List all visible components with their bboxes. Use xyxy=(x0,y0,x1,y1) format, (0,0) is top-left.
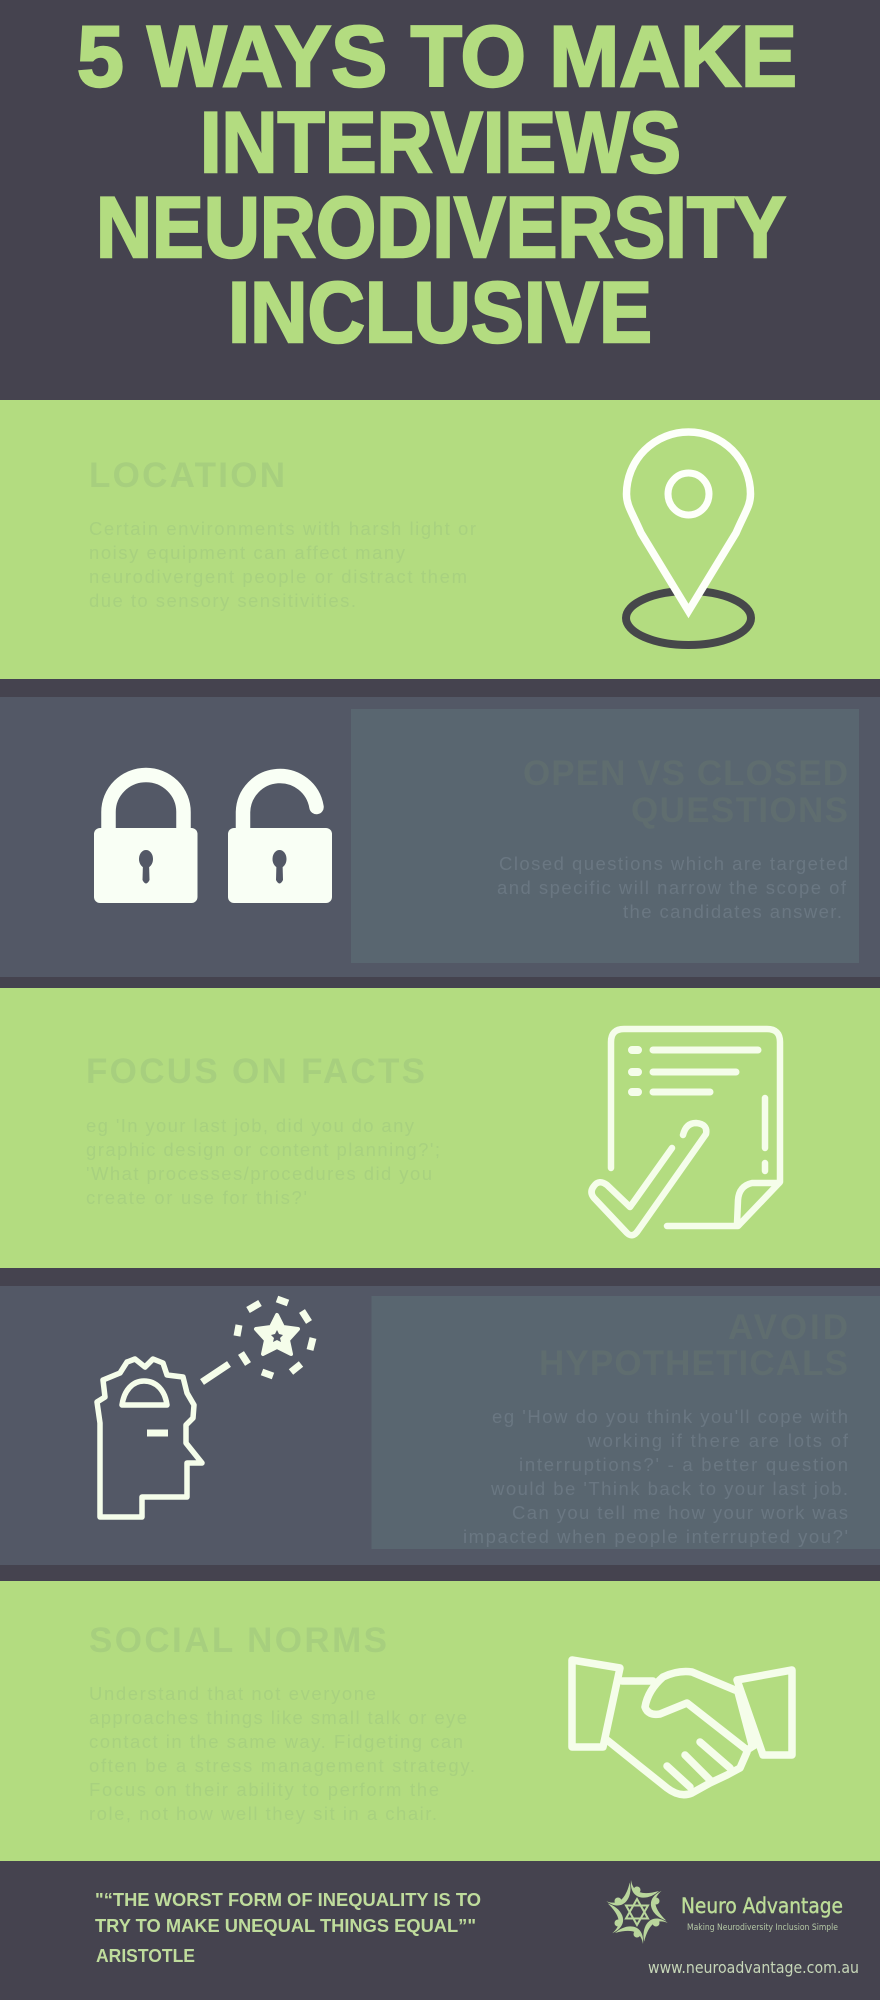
icon: map pin xyxy=(626,432,751,645)
text block: focus on facts: create or use for this?' xyxy=(86,1187,307,1208)
text block: avoid hypotheticals: impacted when people interrupted you?' xyxy=(463,1526,848,1547)
panel: footer xyxy=(0,1861,880,2000)
text block: avoid hypotheticals: Can you tell me how your work was xyxy=(512,1502,848,1523)
heading: open vs closed questions: OPEN VS CLOSED xyxy=(523,754,848,793)
heading: open vs closed questions: QUESTIONS xyxy=(631,791,848,830)
heading: open vs closed questions xyxy=(523,754,848,830)
icon: head with gear and star xyxy=(97,1299,313,1517)
text block: avoid hypotheticals: working if there are lots of xyxy=(586,1430,849,1451)
text block: location xyxy=(89,518,476,611)
icon: handshake xyxy=(572,1660,792,1795)
text block: location: noisy equipment can affect many xyxy=(89,542,406,563)
heading: avoid hypotheticals: HYPOTHETICALS xyxy=(539,1344,848,1383)
text block: social norms: often be a stress management strategy. xyxy=(89,1755,475,1776)
text block: open vs closed questions: Closed questions which are targeted xyxy=(499,853,848,874)
heading: location: LOCATION xyxy=(89,456,285,495)
text block: location: neurodivergent people or distract them xyxy=(89,566,467,587)
icon: open padlock xyxy=(228,776,332,903)
icon: neuro advantage logo xyxy=(598,1877,676,1947)
text block: focus on facts xyxy=(86,1115,440,1208)
text box background xyxy=(372,1296,880,1549)
heading: focus on facts: FOCUS ON FACTS xyxy=(86,1052,425,1091)
text block: social norms: Focus on their ability to perform the xyxy=(89,1779,439,1800)
quote: "“THE WORST FORM OF INEQUALITY IS TO xyxy=(95,1889,481,1910)
title: INTERVIEWS xyxy=(200,95,681,191)
heading: avoid hypotheticals xyxy=(539,1308,848,1383)
website: www.neuroadvantage.com.au xyxy=(648,1958,859,1977)
quote xyxy=(95,1889,481,1966)
text block: social norms: approaches things like small talk or eye xyxy=(89,1707,467,1728)
panel: social norms xyxy=(0,1581,880,1861)
title xyxy=(77,9,797,361)
text block: avoid hypotheticals xyxy=(463,1406,849,1547)
panel: avoid hypotheticals xyxy=(0,1286,880,1565)
icon: closed padlock xyxy=(94,775,198,903)
icon: checklist document xyxy=(592,1029,780,1235)
text block: avoid hypotheticals: interruptions?' - a better question xyxy=(519,1454,848,1475)
heading: social norms: SOCIAL NORMS xyxy=(89,1621,387,1660)
quote: ARISTOTLE xyxy=(96,1945,195,1966)
tagline: Making Neurodiversity Inclusion Simple xyxy=(687,1923,838,1933)
text block: social norms: role, not how well they sit in a chair. xyxy=(89,1803,437,1824)
title: 5 WAYS TO MAKE xyxy=(77,9,797,105)
panel: open vs closed questions xyxy=(0,697,880,977)
text block: social norms: contact in the same way. Fidgeting can xyxy=(89,1731,463,1752)
title: NEURODIVERSITY xyxy=(96,180,786,276)
text block: social norms: Understand that not everyone xyxy=(89,1683,376,1704)
heading: avoid hypotheticals: AVOID xyxy=(728,1308,848,1347)
text block: avoid hypotheticals: would be 'Think back to your last job. xyxy=(490,1478,848,1499)
text block: focus on facts: eg 'In your last job, did you do any xyxy=(86,1115,415,1136)
text block: open vs closed questions xyxy=(497,853,848,922)
text block: open vs closed questions: and specific will narrow the scope of xyxy=(497,877,847,898)
panel: location xyxy=(0,400,880,679)
quote: TRY TO MAKE UNEQUAL THINGS EQUAL”" xyxy=(95,1915,476,1936)
title: INCLUSIVE xyxy=(228,265,652,361)
text box background xyxy=(351,709,859,963)
text block: open vs closed questions: the candidates answer. xyxy=(623,901,842,922)
text block: location: due to sensory sensitivities. xyxy=(89,590,356,611)
text block: avoid hypotheticals: eg 'How do you think you'll cope with xyxy=(492,1406,848,1427)
brand name: Neuro Advantage xyxy=(681,1894,843,1918)
panel: focus on facts xyxy=(0,988,880,1268)
text block: focus on facts: 'What processes/procedures did you xyxy=(86,1163,432,1184)
text block: focus on facts: graphic design or content planning?'; xyxy=(86,1139,440,1160)
text block: location: Certain environments with harsh light or xyxy=(89,518,476,539)
text block: social norms xyxy=(89,1683,475,1824)
